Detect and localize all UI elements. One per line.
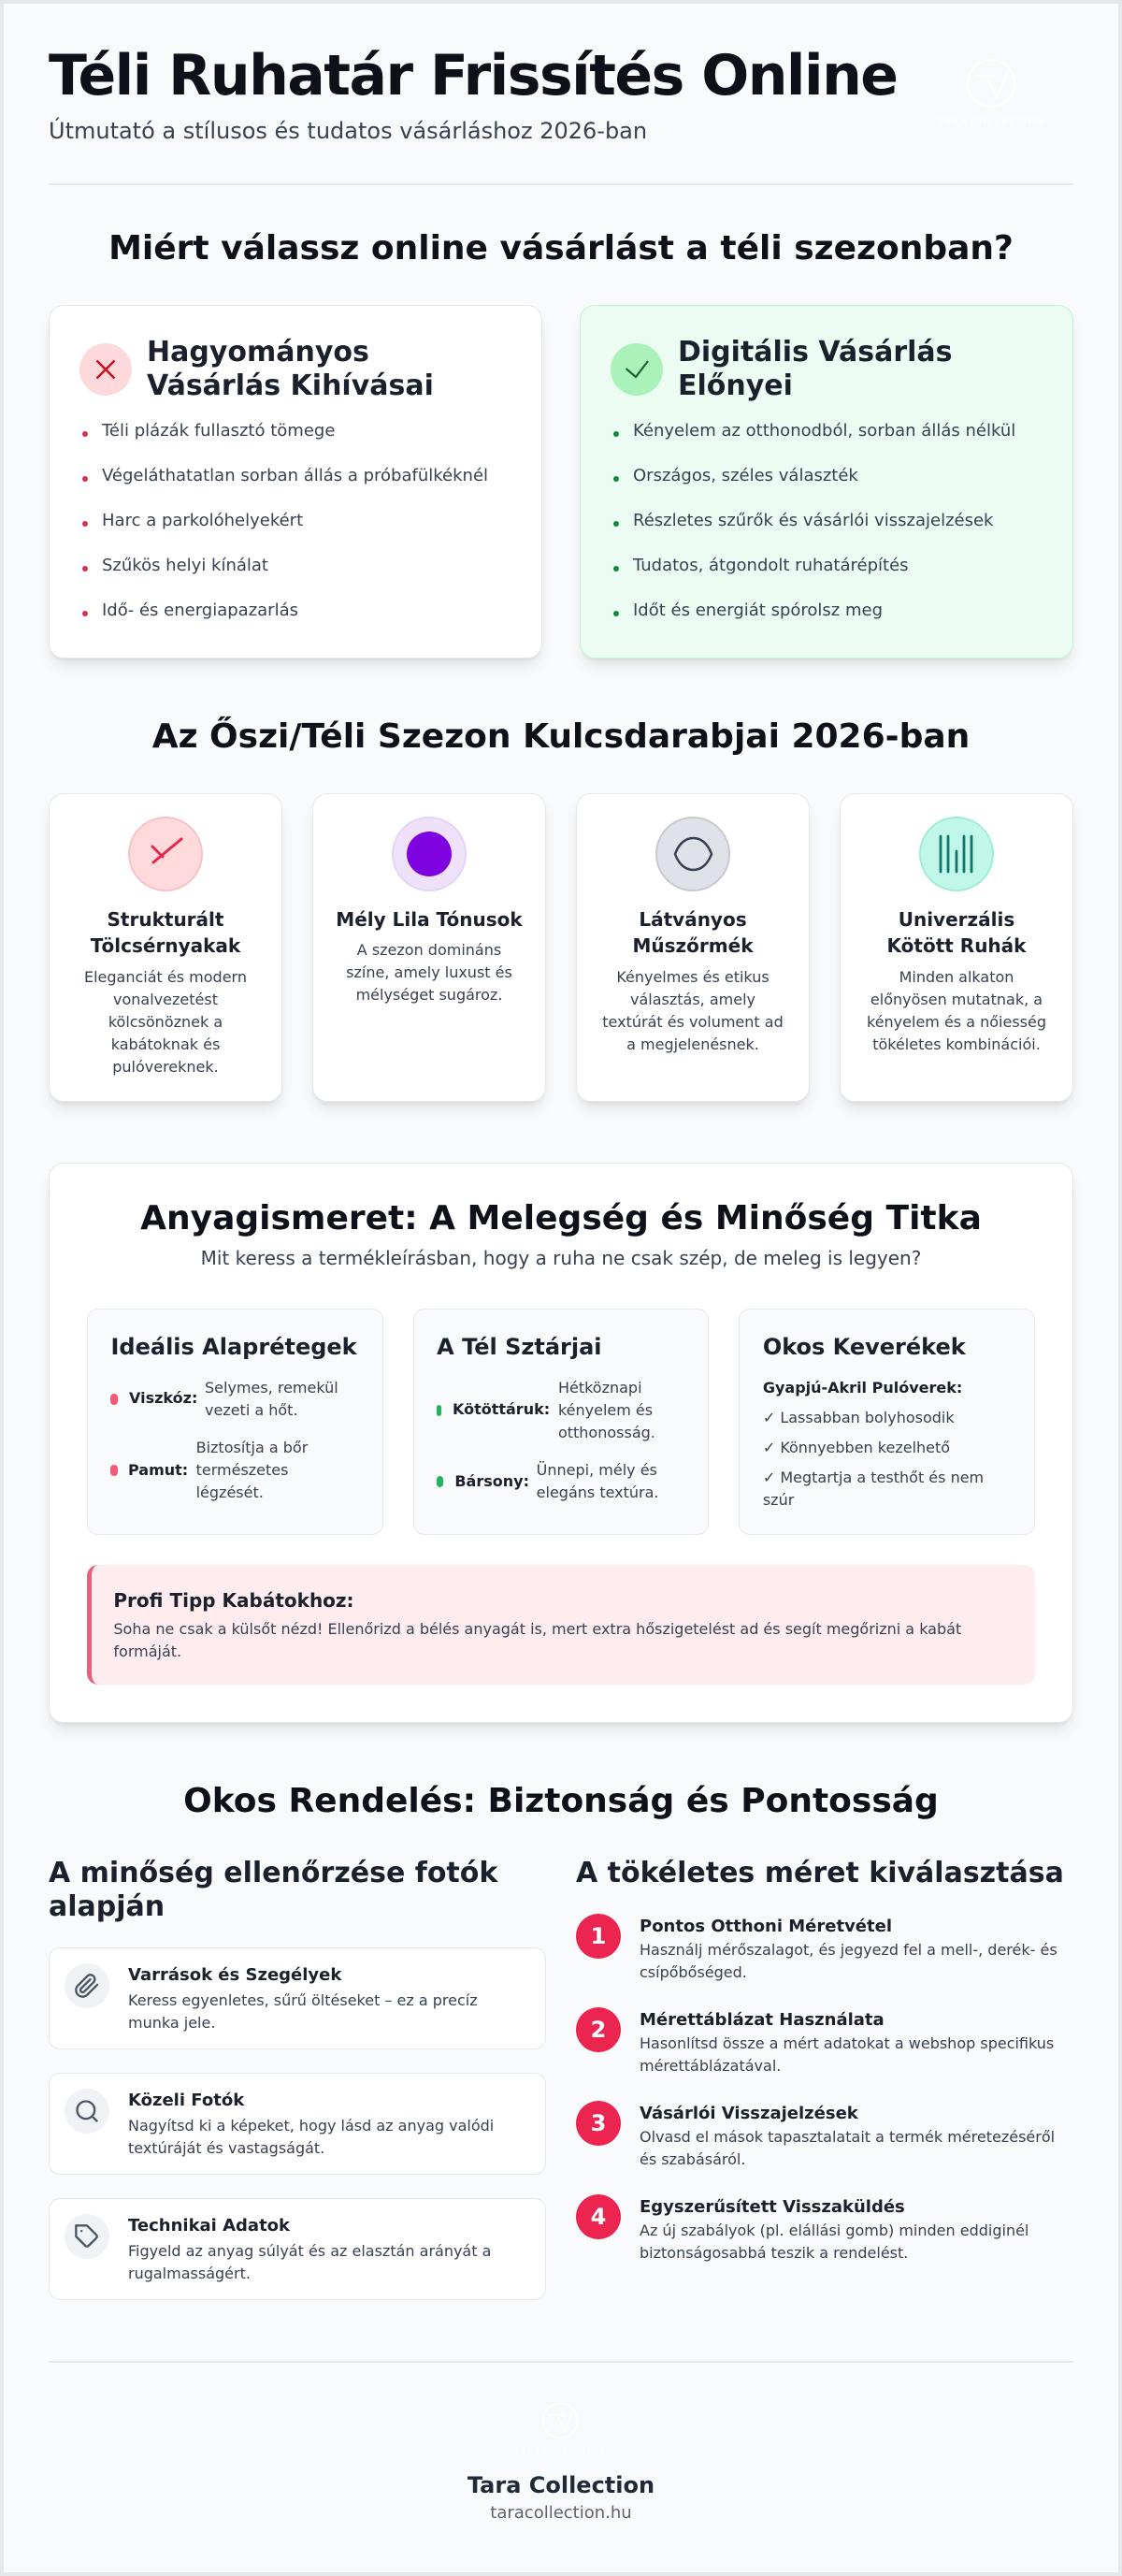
step text: Az új szabályok (pl. elállási gomb) minden eddiginél xyxy=(640,2221,1028,2239)
footer url: taracollection.hu xyxy=(490,2503,632,2523)
card heading: Digitális Vásárlás xyxy=(678,336,952,369)
icon: knit bars xyxy=(919,817,994,891)
description xyxy=(558,1379,655,1440)
item title: Strukturált xyxy=(108,908,223,931)
label: Viszkóz: xyxy=(129,1389,197,1407)
description xyxy=(537,1461,658,1500)
tip text xyxy=(128,1990,478,2032)
step text xyxy=(640,2034,1054,2075)
description: vezeti a hőt. xyxy=(205,1401,298,1418)
heading: smart ordering: Okos Rendelés: Biztonság és Pontosság xyxy=(183,1782,939,1820)
step text xyxy=(640,2128,1055,2168)
check item xyxy=(763,1469,984,1508)
item description: pulóvereknek. xyxy=(112,1057,219,1076)
item title: Tölcsérnyakak xyxy=(91,934,240,957)
description: elegáns textúra. xyxy=(537,1483,658,1500)
callout text: formáját. xyxy=(113,1643,181,1659)
panel: statement faux fur xyxy=(576,793,810,1102)
item description: a megjelenésnek. xyxy=(626,1035,759,1053)
item title: Kötött Ruhák xyxy=(887,934,1026,957)
check item: szúr xyxy=(763,1491,794,1508)
panel: universal knit dresses xyxy=(840,793,1073,1102)
item description: választás, amely xyxy=(630,990,755,1008)
item description: színe, amely luxust és xyxy=(346,963,512,981)
heading: why online: Miért válassz online vásárlást a téli szezonban? xyxy=(108,229,1014,268)
item title xyxy=(90,908,241,957)
item title: Látványos xyxy=(639,908,747,931)
description xyxy=(205,1379,338,1418)
icon: header logo: TARA COLLECTION xyxy=(937,116,1045,127)
materials subtitle: Mit keress a termékleírásban, hogy a ruha ne csak szép, de meleg is legyen? xyxy=(201,1247,921,1269)
list item: Szűkös helyi kínálat xyxy=(102,556,268,575)
item description xyxy=(84,967,247,1076)
step number: 3 xyxy=(591,2110,606,2136)
list item: Országos, széles választék xyxy=(633,466,858,485)
tip text: Figyeld az anyag súlyát és az elasztán arányát a xyxy=(128,2241,491,2260)
card heading xyxy=(147,336,434,402)
footer brand: Tara Collection xyxy=(468,2472,654,2498)
tip text: Nagyítsd ki a képeket, hogy lásd az anyag valódi xyxy=(128,2116,494,2135)
item description xyxy=(867,967,1046,1053)
item description: vonalvezetést xyxy=(113,990,218,1008)
step 2 xyxy=(576,2007,1054,2075)
icon: cross xyxy=(79,343,132,396)
description: légzését. xyxy=(196,1483,264,1500)
icon: almond shape xyxy=(655,817,730,891)
step text: biztonságosabbá teszik a rendelést. xyxy=(640,2244,908,2262)
icon: purple dot xyxy=(392,817,467,891)
panel: deep purple tones xyxy=(312,793,546,1102)
item title: Műszőrmék xyxy=(632,934,754,957)
label: Kötöttáruk: xyxy=(453,1400,550,1418)
description: Biztosítja a bőr xyxy=(196,1439,308,1455)
heading: materials: Anyagismeret: A Melegség és Minőség Titka xyxy=(140,1199,982,1237)
panel: close-ups xyxy=(49,2073,546,2175)
tip text: Keress egyenletes, sűrű öltéseket – ez a precíz xyxy=(128,1990,478,2009)
tip text xyxy=(128,2241,491,2282)
item description: Eleganciát és modern xyxy=(84,967,247,986)
panel: winter stars xyxy=(413,1309,709,1535)
step text: Olvasd el mások tapasztalatait a termék méretezéséről xyxy=(640,2128,1055,2146)
callout title: Profi Tipp Kabátokhoz: xyxy=(113,1589,354,1612)
step text xyxy=(640,2221,1028,2262)
icon: neck lines xyxy=(128,817,203,891)
step 3 xyxy=(576,2101,1055,2168)
description xyxy=(196,1439,309,1500)
list item: Tudatos, átgondolt ruhatárépítés xyxy=(633,556,909,575)
panel: traditional shopping challenges xyxy=(49,305,542,658)
step text xyxy=(640,1941,1057,1981)
card heading: Vásárlás Kihívásai xyxy=(147,369,434,402)
item description: textúrát és volument ad xyxy=(602,1012,784,1031)
icon: footer logo xyxy=(513,2399,607,2457)
step number: 4 xyxy=(591,2204,606,2230)
step text: Hasonlítsd össze a mért adatokat a webshop specifikus xyxy=(640,2034,1054,2052)
label: Bársony: xyxy=(454,1472,529,1489)
item description: mélységet sugároz. xyxy=(356,986,502,1004)
check item: ✓ Könnyebben kezelhető xyxy=(763,1439,950,1455)
list item: Téli plázák fullasztó tömege xyxy=(102,421,335,441)
step number: 2 xyxy=(591,2017,606,2043)
list item: Részletes szűrők és vásárlói visszajelzések xyxy=(633,511,993,530)
marker xyxy=(437,1405,441,1416)
panel: structured turtlenecks xyxy=(49,793,282,1102)
marker xyxy=(110,1394,118,1405)
icon: magnifier xyxy=(65,2089,109,2134)
card heading: Előnyei xyxy=(678,369,793,402)
tip title: Közeli Fotók xyxy=(128,2091,244,2110)
icon: paperclip xyxy=(65,1963,109,2008)
card heading: Hagyományos xyxy=(147,336,369,369)
item description: A szezon domináns xyxy=(357,941,501,959)
item title xyxy=(887,908,1027,957)
check item: ✓ Megtartja a testhőt és nem xyxy=(763,1469,984,1485)
tip title: Technikai Adatok xyxy=(128,2216,290,2236)
card heading xyxy=(678,336,952,402)
item description: Kényelmes és etikus xyxy=(616,967,770,986)
panel: seams xyxy=(49,1947,546,2049)
title: Téli Ruhatár Frissítés Online xyxy=(49,43,897,109)
step title: Egyszerűsített Visszaküldés xyxy=(640,2197,905,2217)
tip text xyxy=(128,2116,494,2157)
step 4 xyxy=(576,2194,1028,2262)
item description: Minden alkaton xyxy=(899,967,1014,986)
step title: Pontos Otthoni Méretvétel xyxy=(640,1917,892,1936)
tip text: textúráját és vastagságát. xyxy=(128,2138,324,2157)
item description: tökéletes kombinációi. xyxy=(872,1035,1041,1053)
list item: Időt és energiát spórolsz meg xyxy=(633,601,883,620)
tip title: Varrások és Szegélyek xyxy=(128,1965,341,1985)
subcard heading: A Tél Sztárjai xyxy=(437,1334,602,1360)
step title: Vásárlói Visszajelzések xyxy=(640,2104,858,2123)
heading: perfect size: A tökéletes méret kiválasztása xyxy=(576,1857,1064,1889)
callout: coat tip xyxy=(87,1565,1035,1685)
step number: 1 xyxy=(591,1923,606,1949)
step text: Használj mérőszalagot, és jegyezd fel a mell-, derék- és xyxy=(640,1941,1057,1959)
check item: ✓ Lassabban bolyhosodik xyxy=(763,1409,955,1425)
icon: check xyxy=(611,343,663,396)
label: Pamut: xyxy=(128,1461,188,1478)
heading: quality check xyxy=(49,1857,498,1923)
item description: kabátoknak és xyxy=(111,1035,220,1053)
subcard heading: Okos Keverékek xyxy=(763,1334,966,1360)
item title: Mély Lila Tónusok xyxy=(336,908,523,931)
item description: előnyösen mutatnak, a xyxy=(870,990,1043,1008)
step text: és szabásáról. xyxy=(640,2150,745,2168)
step 1 xyxy=(576,1914,1057,1981)
item description: kölcsönöznek a xyxy=(108,1012,223,1031)
step text: csípőbőséged. xyxy=(640,1963,747,1981)
list item: Kényelem az otthonodból, sorban állás nélkül xyxy=(633,421,1015,441)
item description xyxy=(602,967,784,1053)
item description: kényelem és a nőiesség xyxy=(867,1012,1046,1031)
description: Hétköznapi xyxy=(558,1379,642,1396)
panel: digital shopping benefits xyxy=(580,305,1073,658)
step title: Mérettáblázat Használata xyxy=(640,2010,885,2030)
list item: Idő- és energiapazarlás xyxy=(102,601,298,620)
heading: key pieces: Az Őszi/Téli Szezon Kulcsdarabjai 2026-ban xyxy=(152,717,970,756)
description: Ünnepi, mély és xyxy=(537,1461,657,1478)
tip text: rugalmasságért. xyxy=(128,2264,251,2282)
subcard heading: Ideális Alaprétegek xyxy=(110,1334,357,1360)
subtitle: Útmutató a stílusos és tudatos vásárláshoz 2026-ban xyxy=(49,118,647,144)
item title: Univerzális xyxy=(899,908,1014,931)
heading: quality check: A minőség ellenőrzése fotók xyxy=(49,1857,497,1889)
list item: Végeláthatatlan sorban állás a próbafülkéknél xyxy=(102,466,488,485)
panel: ideal base layers xyxy=(87,1309,383,1535)
icon: tag xyxy=(65,2214,109,2259)
icon: header logo xyxy=(935,56,1047,131)
description: Selymes, remekül xyxy=(205,1379,338,1396)
step number xyxy=(576,2007,621,2052)
tip text: munka jele. xyxy=(128,2013,215,2032)
marker xyxy=(437,1476,443,1487)
list item: Harc a parkolóhelyekért xyxy=(102,511,303,530)
description: otthonosság. xyxy=(558,1424,655,1440)
label: Gyapjú-Akril Pulóverek: xyxy=(763,1379,962,1396)
icon: footer logo: TARA COLLECTION xyxy=(514,2446,606,2455)
marker xyxy=(110,1465,118,1476)
step number xyxy=(576,2194,621,2239)
item description xyxy=(346,941,512,1004)
panel: technical data xyxy=(49,2198,546,2300)
description: kényelem és xyxy=(558,1401,653,1418)
step text: mérettáblázatával. xyxy=(640,2057,781,2075)
callout text: Soha ne csak a külsőt nézd! Ellenőrizd a bélés anyagát is, mert extra hőszigetelést ad és segít megőrizni a kabát xyxy=(113,1620,961,1637)
description: természetes xyxy=(196,1461,288,1478)
callout text xyxy=(113,1620,961,1659)
heading: quality check: alapján xyxy=(49,1890,165,1923)
step number xyxy=(576,1914,621,1959)
panel: smart blends xyxy=(739,1309,1035,1535)
panel: materials xyxy=(49,1163,1073,1723)
item title xyxy=(632,908,754,957)
step number xyxy=(576,2101,621,2146)
